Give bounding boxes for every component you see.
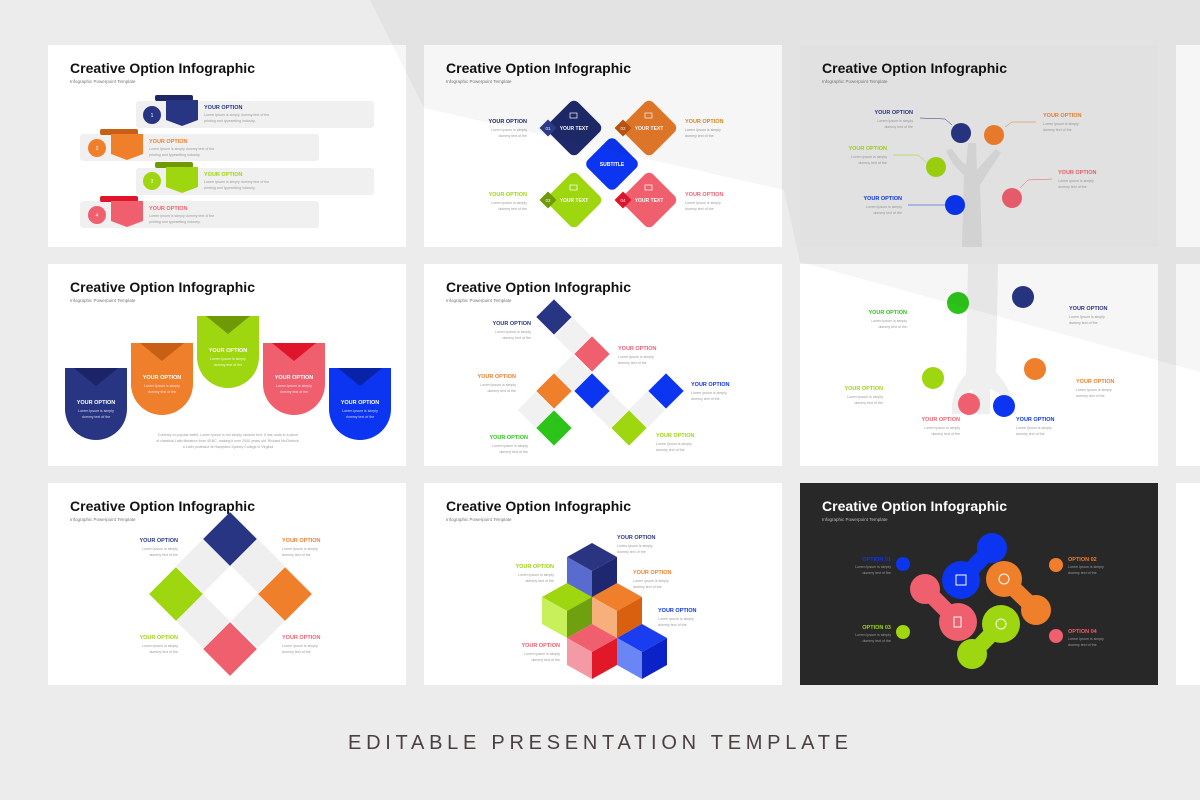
slide 4: shields: dummy text of the: [214, 363, 242, 367]
slide 7: big diamond: Infographic Powerpoint Template: [70, 517, 136, 522]
slide 8: cubes: Infographic Powerpoint Template: [446, 517, 512, 522]
slide 3: tree circles: YOUR OPTION: [1058, 170, 1097, 176]
slide 9: dark blobs: Lorem Ipsum is simply: [855, 633, 891, 637]
slide 8: cubes: dummy text of the: [525, 579, 554, 583]
slide 1: ribbon options: printing and typesetting industry.: [204, 119, 255, 123]
slide 2: diamond grid: dummy text of the: [498, 134, 527, 138]
slide 6: tree roots: dummy text of the: [931, 432, 960, 436]
slide 7: big diamond: dummy text of the: [282, 650, 311, 654]
slide 6: tree roots: YOUR OPTION: [1016, 417, 1055, 423]
slide 6: tree roots: dummy text of the: [854, 401, 883, 405]
slide 3: tree circles: YOUR OPTION: [874, 110, 913, 116]
slide 8: cubes: YOUR OPTION: [658, 608, 697, 614]
slide 5: diamond steps: dummy text of the: [487, 389, 516, 393]
slide 4: shields: dummy text of the: [82, 415, 110, 419]
slide 2: diamond grid: Lorem Ipsum is simply: [491, 201, 527, 205]
slide 3: tree circles: dummy text of the: [1043, 128, 1072, 132]
slide 4: shields: Contrary to popular belief, Lorem Ipsum is not simply random text. It has roots in a piece: [158, 433, 298, 437]
slide 2: diamond grid: YOUR TEXT: [635, 198, 663, 204]
slide 5: diamond steps: dummy text of the: [502, 336, 531, 340]
slide 4: shields: Lorem Ipsum is simply: [144, 384, 180, 388]
slide 4: shields: YOUR OPTION: [341, 400, 379, 406]
slide 5: diamond steps: Lorem Ipsum is simply: [495, 330, 531, 334]
slide 7: big diamond: Lorem Ipsum is simply: [142, 547, 178, 551]
slide 6: tree roots: YOUR OPTION: [844, 386, 883, 392]
slide 9: dark blobs: Creative Option Infographic: [822, 498, 1007, 514]
slide 6: tree roots: Lorem Ipsum is simply: [924, 426, 960, 430]
slide 6: tree roots: YOUR OPTION: [1076, 379, 1115, 385]
slide 1: ribbon options: printing and typesetting industry.: [149, 153, 200, 157]
slide 5: diamond steps: dummy text of the: [691, 397, 720, 401]
slide 4: shields: YOUR OPTION: [275, 375, 313, 381]
slide 5: diamond steps: YOUR OPTION: [489, 435, 528, 441]
slide 6: tree roots: Lorem Ipsum is simply: [871, 319, 907, 323]
slide 6: tree roots: [800, 264, 1158, 466]
slide 7: big diamond: Lorem Ipsum is simply: [142, 644, 178, 648]
slide 6: tree roots: YOUR OPTION: [921, 417, 960, 423]
slide 2: diamond grid: YOUR OPTION: [488, 192, 527, 198]
slide 2: diamond grid: Creative Option Infographic: [446, 60, 631, 76]
slide 1: ribbon options: Lorem Ipsum is simply dummy text of the: [149, 214, 214, 218]
slide 8: cubes: Lorem Ipsum is simply: [524, 652, 560, 656]
slide 9: dark blobs: dummy text of the: [1068, 643, 1097, 647]
slide 5: diamond steps: dummy text of the: [618, 361, 647, 365]
slide 5: diamond steps: dummy text of the: [656, 448, 685, 452]
slide 1: ribbon options: Infographic Powerpoint Template: [70, 79, 136, 84]
slide 5: diamond steps: Lorem Ipsum is simply: [691, 391, 727, 395]
slide 7: big diamond: dummy text of the: [149, 553, 178, 557]
slide 5: diamond steps: YOUR OPTION: [477, 374, 516, 380]
slide 7: big diamond: dummy text of the: [149, 650, 178, 654]
slide 2: diamond grid: YOUR TEXT: [560, 198, 588, 204]
slide 1: ribbon options: 1: [151, 113, 154, 119]
slide 8: cubes: dummy text of the: [531, 658, 560, 662]
slide 1: ribbon options: Lorem Ipsum is simply dummy text of the: [149, 147, 214, 151]
slide 3: tree circles: dummy text of the: [884, 125, 913, 129]
slide 1: ribbon options: YOUR OPTION: [149, 139, 188, 145]
slide 6: tree roots: YOUR OPTION: [1069, 306, 1108, 312]
slide 1: ribbon options: 2: [96, 146, 99, 152]
slide 6: tree roots: Lorem Ipsum is simply: [1069, 315, 1105, 319]
slide 5: diamond steps: Lorem Ipsum is simply: [656, 442, 692, 446]
slide 8: cubes: dummy text of the: [633, 585, 662, 589]
slide 2: diamond grid: YOUR TEXT: [635, 126, 663, 132]
slide 1: ribbon options: 4: [96, 213, 99, 219]
slide 6: tree roots: Lorem Ipsum is simply: [847, 395, 883, 399]
slide 1: ribbon options: YOUR OPTION: [204, 105, 243, 111]
slide 4: shields: Infographic Powerpoint Template: [70, 298, 136, 303]
slide 4: shields: Lorem Ipsum is simply: [342, 409, 378, 413]
slide 6: tree roots: YOUR OPTION: [868, 310, 907, 316]
slide 7: big diamond: YOUR OPTION: [139, 635, 178, 641]
slide 9: dark blobs: OPTION 03: [862, 625, 891, 631]
slide 7: big diamond: YOUR OPTION: [282, 635, 321, 641]
slide 3: tree circles: dummy text of the: [858, 161, 887, 165]
slide 1: ribbon options: Creative Option Infographic: [70, 60, 255, 76]
slide 3: tree circles: Lorem Ipsum is simply: [1058, 179, 1094, 183]
slide 5: diamond steps: YOUR OPTION: [691, 382, 730, 388]
slide 2: diamond grid: Lorem Ipsum is simply: [685, 201, 721, 205]
slide 5: diamond steps: YOUR OPTION: [656, 433, 695, 439]
slide 3: tree circles: dummy text of the: [873, 211, 902, 215]
slide 4: shields: YOUR OPTION: [209, 348, 247, 354]
slide 8: cubes: YOUR OPTION: [521, 643, 560, 649]
slide 1: ribbon options: printing and typesetting industry.: [204, 186, 255, 190]
slide 8: cubes: Lorem Ipsum is simply: [617, 544, 653, 548]
slide 1: ribbon options: Lorem Ipsum is simply dummy text of the: [204, 180, 269, 184]
slide 5: diamond steps: Lorem Ipsum is simply: [618, 355, 654, 359]
slide 5: diamond steps: Infographic Powerpoint Template: [446, 298, 512, 303]
slide 4: shields: [48, 264, 406, 466]
slide 6: tree roots: dummy text of the: [1069, 321, 1098, 325]
slide 2: diamond grid: [424, 45, 782, 247]
slide 3: tree circles: Lorem Ipsum is simply: [1043, 122, 1079, 126]
slide 2: diamond grid: Lorem Ipsum is simply: [491, 128, 527, 132]
slide 6: tree roots: dummy text of the: [1016, 432, 1045, 436]
slide 5: diamond steps: Lorem Ipsum is simply: [480, 383, 516, 387]
slide 8: cubes: YOUR OPTION: [617, 535, 656, 541]
slide 9: dark blobs: Infographic Powerpoint Template: [822, 517, 888, 522]
slide 1: ribbon options: YOUR OPTION: [204, 172, 243, 178]
slide 9: dark blobs: dummy text of the: [862, 571, 891, 575]
slide 4: shields: YOUR OPTION: [77, 400, 115, 406]
slide 6: tree roots: dummy text of the: [878, 325, 907, 329]
slide 8: cubes: Creative Option Infographic: [446, 498, 631, 514]
slide 5: diamond steps: YOUR OPTION: [618, 346, 657, 352]
slide 6: tree roots: Lorem Ipsum is simply: [1076, 388, 1112, 392]
slide 8: cubes: dummy text of the: [658, 623, 687, 627]
slide 6: tree roots: Lorem Ipsum is simply: [1016, 426, 1052, 430]
slide 5: diamond steps: YOUR OPTION: [492, 321, 531, 327]
slide 4: shields: of classical Latin literature from 45 BC, making it over 2000 years old. Richard McClintock,: [156, 439, 300, 443]
slide 3: tree circles: YOUR OPTION: [863, 196, 902, 202]
slide 1: ribbon options: 3: [151, 179, 154, 185]
slide 7: big diamond: [48, 483, 406, 685]
slide 4: shields: dummy text of the: [280, 390, 308, 394]
slide 2: diamond grid: YOUR OPTION: [685, 119, 724, 125]
slide 4: shields: dummy text of the: [346, 415, 374, 419]
slide 4: shields: dummy text of the: [148, 390, 176, 394]
slide 9: dark blobs: [800, 483, 1158, 685]
slide 2: diamond grid: Infographic Powerpoint Template: [446, 79, 512, 84]
slide 2: diamond grid: YOUR OPTION: [488, 119, 527, 125]
slide 3: tree circles: YOUR OPTION: [1043, 113, 1082, 119]
slide 9: dark blobs: OPTION 02: [1068, 557, 1097, 563]
slide 9: dark blobs: OPTION 01: [862, 557, 891, 563]
slide 8: cubes: YOUR OPTION: [633, 570, 672, 576]
slide 7: big diamond: dummy text of the: [282, 553, 311, 557]
slide 9: dark blobs: Lorem Ipsum is simply: [855, 565, 891, 569]
slide 2: diamond grid: YOUR TEXT: [560, 126, 588, 132]
slide 7: big diamond: Creative Option Infographic: [70, 498, 255, 514]
slide 4: shields: Creative Option Infographic: [70, 279, 255, 295]
slide 7: big diamond: Lorem Ipsum is simply: [282, 547, 318, 551]
slide 1: ribbon options: [48, 45, 406, 247]
slide 7: big diamond: YOUR OPTION: [139, 538, 178, 544]
slide 9: dark blobs: Lorem Ipsum is simply: [1068, 637, 1104, 641]
slide 3: tree circles: Lorem Ipsum is simply: [866, 205, 902, 209]
slide 3: tree circles: dummy text of the: [1058, 185, 1087, 189]
slide 4: shields: Lorem Ipsum is simply: [78, 409, 114, 413]
slide 8: cubes: [424, 483, 782, 685]
slide 8: cubes: dummy text of the: [617, 550, 646, 554]
slide 8: cubes: Lorem Ipsum is simply: [633, 579, 669, 583]
slide 2: diamond grid: 04: [620, 198, 626, 203]
window light shadow overlay: [370, 0, 1200, 372]
partial slides at right edge: [1176, 45, 1200, 685]
slide 9: dark blobs: dummy text of the: [1068, 571, 1097, 575]
slide 2: diamond grid: Lorem Ipsum is simply: [685, 128, 721, 132]
slide 4: shields: YOUR OPTION: [143, 375, 181, 381]
slide 7: big diamond: YOUR OPTION: [282, 538, 321, 544]
slide 7: big diamond: Lorem Ipsum is simply: [282, 644, 318, 648]
slide 4: shields: Lorem Ipsum is simply: [276, 384, 312, 388]
slide 3: tree circles: Creative Option Infographic: [822, 60, 1007, 76]
slide 8: cubes: YOUR OPTION: [515, 564, 554, 570]
slide 5: diamond steps: dummy text of the: [499, 450, 528, 454]
slide 4: shields: a Latin professor at Hampden-Sydney College in Virginia: [183, 445, 273, 449]
slide 3: tree circles: Lorem Ipsum is simply: [851, 155, 887, 159]
slide 2: diamond grid: dummy text of the: [685, 207, 714, 211]
slide 2: diamond grid: YOUR OPTION: [685, 192, 724, 198]
slide 3: tree circles: Lorem Ipsum is simply: [877, 119, 913, 123]
slide 3: tree circles: YOUR OPTION: [848, 146, 887, 152]
slide 3: tree circles: [800, 45, 1158, 247]
slide 4: shields: Lorem Ipsum is simply: [210, 357, 246, 361]
slide 2: diamond grid: dummy text of the: [498, 207, 527, 211]
slide 5: diamond steps: Lorem Ipsum is simply: [492, 444, 528, 448]
slide 6: tree roots: dummy text of the: [1076, 394, 1105, 398]
slide 8: cubes: Lorem Ipsum is simply: [658, 617, 694, 621]
slide 2: diamond grid: SUBTITLE: [600, 162, 625, 168]
footer caption: EDITABLE PRESENTATION TEMPLATE: [348, 732, 852, 754]
slide 5: diamond steps: Creative Option Infographic: [446, 279, 631, 295]
slide 2: diamond grid: dummy text of the: [685, 134, 714, 138]
slide 2: diamond grid: 02: [620, 126, 626, 131]
slide 9: dark blobs: dummy text of the: [862, 639, 891, 643]
slide 1: ribbon options: printing and typesetting industry.: [149, 220, 200, 224]
slide 1: ribbon options: YOUR OPTION: [149, 206, 188, 212]
slide 9: dark blobs: OPTION 04: [1068, 629, 1098, 635]
slide 3: tree circles: Infographic Powerpoint Template: [822, 79, 888, 84]
slide 8: cubes: Lorem Ipsum is simply: [518, 573, 554, 577]
slide 5: diamond steps: [424, 264, 782, 466]
slide 1: ribbon options: Lorem Ipsum is simply dummy text of the: [204, 113, 269, 117]
slide 2: diamond grid: 03: [545, 198, 551, 203]
slide 9: dark blobs: Lorem Ipsum is simply: [1068, 565, 1104, 569]
slide 2: diamond grid: 01: [545, 126, 551, 131]
